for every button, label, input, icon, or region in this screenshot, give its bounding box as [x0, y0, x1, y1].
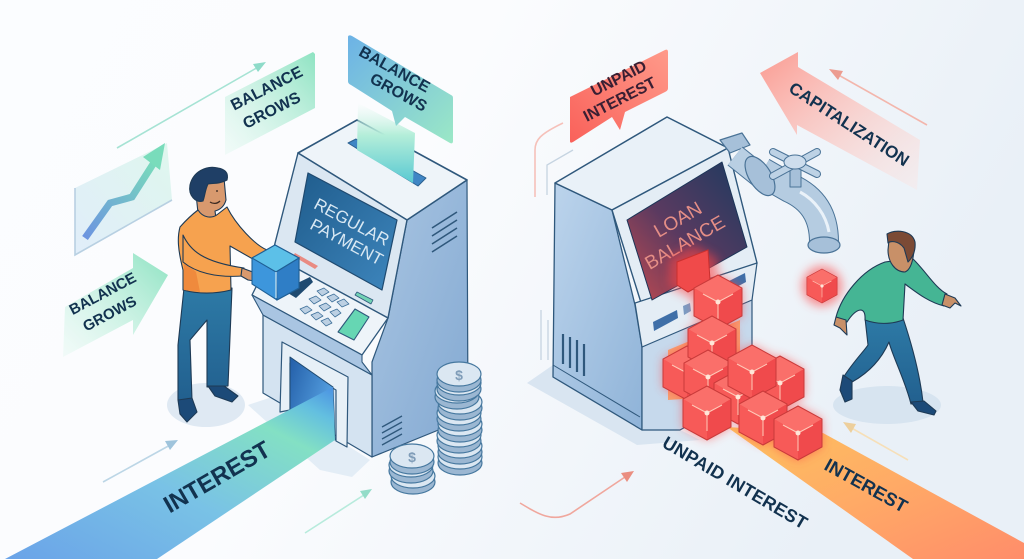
screen [627, 162, 747, 300]
bezel [612, 148, 757, 325]
faucet collar [739, 152, 781, 200]
torso shading [184, 262, 200, 292]
head [888, 236, 914, 272]
screen: BALANCE [642, 212, 729, 275]
screen [295, 173, 397, 290]
ATM: loan balance machine [553, 117, 757, 430]
console [252, 255, 388, 355]
vents lower [382, 416, 402, 445]
bubble: balance grows green: BALANCE [228, 64, 306, 114]
interest ribbon [5, 387, 335, 559]
chart: rising balance line [75, 143, 172, 255]
bubble: balance grows green [225, 52, 315, 155]
vents upper [432, 212, 457, 252]
tall coin stack: $ [455, 367, 463, 383]
door dark [668, 320, 740, 400]
bubble: balance grows blue [348, 35, 453, 143]
pile of red cubes [663, 250, 822, 460]
door frame [280, 342, 348, 447]
shadow: ATM floor [527, 365, 700, 445]
indicator green [355, 292, 373, 304]
bubble: unpaid interest: UNPAID [588, 58, 650, 100]
faucet [720, 133, 840, 253]
left body [553, 183, 642, 430]
neck and face [196, 178, 226, 220]
faucet pipe [735, 156, 760, 176]
door interior [290, 357, 335, 440]
label: unpaid interest floor: UNPAID INTEREST [659, 432, 811, 533]
torso [836, 258, 947, 323]
arm [183, 235, 244, 276]
hair [887, 231, 915, 262]
arrow: balance grows: BALANCE [67, 269, 139, 319]
falling red cube [807, 269, 837, 303]
bubble: unpaid interest: INTEREST [581, 74, 659, 126]
ATM lower body [263, 315, 372, 457]
interest ribbon orange [727, 427, 1024, 559]
base line [553, 365, 640, 417]
person: paying customer [167, 167, 267, 427]
console [635, 263, 757, 347]
console slots [653, 310, 678, 331]
ATM right side [372, 180, 468, 457]
panel: unpaid interest scene [520, 50, 1024, 559]
screen bezel [272, 153, 407, 318]
paper slip out of slot [357, 103, 415, 183]
arrow: balance grows [63, 253, 168, 357]
hand [241, 268, 262, 282]
shoes [178, 398, 197, 422]
card slot [283, 277, 313, 298]
torso [178, 207, 267, 293]
screen: REGULAR [311, 194, 392, 250]
top face [555, 117, 728, 210]
ATM: regular payment machine [252, 120, 468, 457]
panel: regular payment scene [5, 35, 482, 559]
faucet flange [720, 133, 750, 153]
faucet spout [762, 172, 824, 242]
arrow: balance grows: GROWS [80, 293, 140, 335]
faucet handle [773, 152, 817, 187]
label: interest on ribbon: INTEREST [821, 454, 912, 517]
decorative motion lines [541, 150, 573, 360]
arrow: thin orange right [843, 422, 908, 460]
arrow: thin upper trend arrow [117, 62, 266, 148]
interest ribbon: INTEREST [159, 436, 276, 519]
confirm button [338, 309, 369, 340]
shoes [840, 375, 852, 402]
arrow: curved red bottom [520, 471, 634, 517]
ATM top face [298, 120, 467, 220]
arrow: thin red upper right [829, 69, 927, 125]
legs [843, 318, 923, 404]
arrow: lower left thin arrow [103, 440, 178, 482]
hair [190, 167, 227, 201]
faucet outlet [808, 237, 840, 253]
arrow: capitalization: CAPITALIZATION [785, 79, 913, 170]
eye and smile [210, 190, 220, 203]
bubble: balance grows blue: GROWS [367, 71, 430, 116]
bracket arrow: upper left [535, 123, 563, 197]
indicator red [293, 253, 318, 269]
arrow: lower middle thin arrow [305, 489, 372, 533]
keypad [300, 288, 349, 326]
bubble: unpaid interest [570, 50, 668, 143]
cube glow [663, 245, 842, 460]
deposit slot [348, 139, 426, 186]
shadow: ATM floor [248, 397, 370, 477]
hands [834, 317, 847, 335]
bubble: balance grows blue: BALANCE [356, 44, 433, 97]
screen: LOAN [651, 198, 706, 242]
payment cube [252, 245, 299, 300]
person: walking away [833, 231, 961, 424]
vents [563, 334, 584, 376]
front lower [642, 295, 752, 430]
short coin stack: $ [408, 449, 416, 465]
screen: PAYMENT [307, 215, 386, 269]
arrow: capitalization [760, 52, 920, 190]
legs [178, 288, 232, 400]
coin stacks [389, 362, 482, 494]
bubble: balance grows green: GROWS [240, 89, 304, 133]
